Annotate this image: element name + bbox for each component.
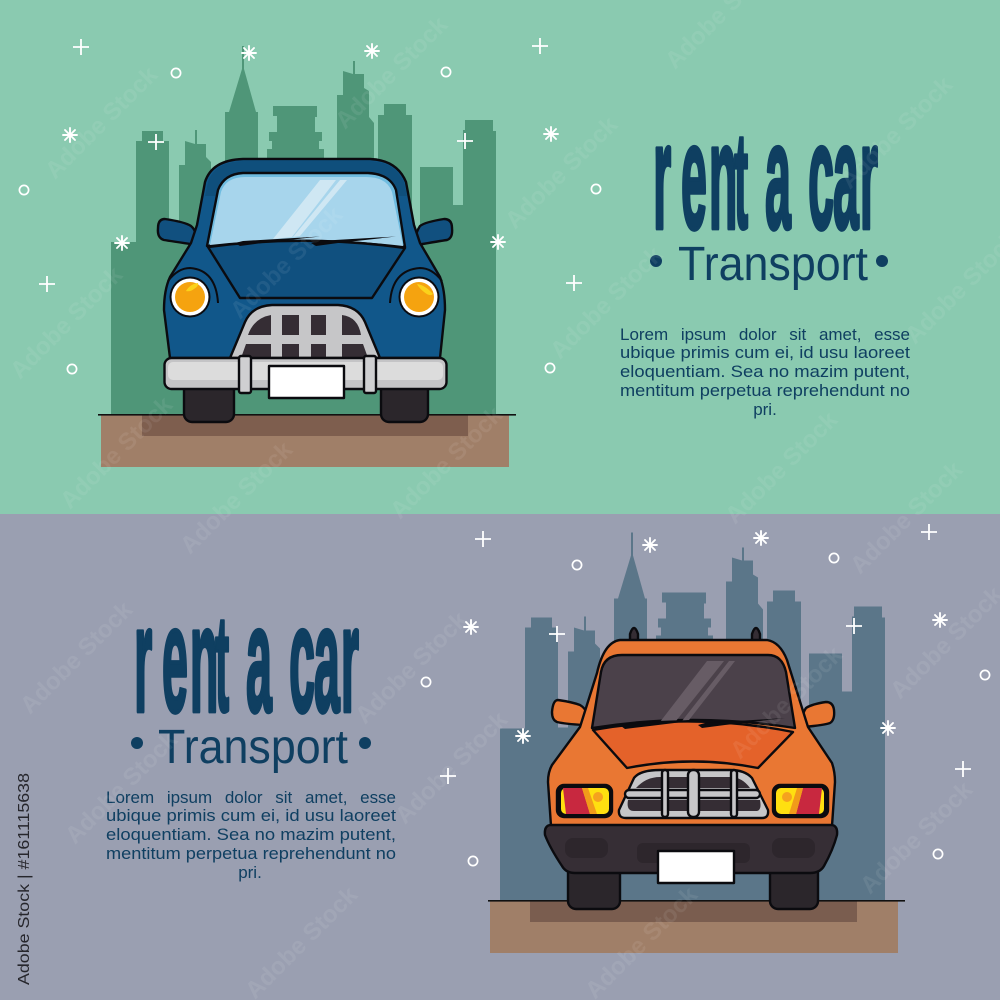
watermarks: Adobe Stock: Adobe Stock bbox=[225, 201, 348, 324]
road: bottom scene bbox=[488, 900, 905, 953]
subheading: Transport: Transport bbox=[158, 721, 348, 774]
body text: top: mentitum perpetua reprehendunt no bbox=[620, 381, 910, 400]
glare bbox=[273, 180, 347, 239]
watermarks: Adobe Stock: Adobe Stock bbox=[5, 261, 128, 384]
hood bbox=[208, 241, 405, 298]
body text: top: Lorem ipsum dolor sit amet, esse bbox=[620, 325, 910, 344]
hood bbox=[593, 721, 793, 768]
body text: top: eloquentiam. Sea no mazim putent, bbox=[620, 362, 910, 381]
left tail light bbox=[557, 785, 612, 817]
body bbox=[164, 159, 445, 358]
body text: bottom bbox=[106, 788, 396, 882]
watermarks: Adobe Stock: Adobe Stock bbox=[15, 596, 138, 719]
right headlight bbox=[398, 276, 440, 318]
watermarks: Adobe Stock: Adobe Stock bbox=[385, 401, 508, 524]
windshield bbox=[207, 173, 405, 247]
panel: grey bottom banner bbox=[0, 514, 1000, 1000]
sparkles: top scene bbox=[19, 38, 601, 374]
watermarks: Adobe Stock: Adobe Stock bbox=[175, 436, 298, 559]
watermarks: Adobe Stock: Adobe Stock bbox=[40, 61, 163, 184]
roof band bbox=[205, 161, 407, 196]
heading: rent a car: rent a car bbox=[653, 92, 878, 260]
watermarks: Adobe Stock: Adobe Stock bbox=[500, 111, 623, 234]
body text: bottom: mentitum perpetua reprehendunt no bbox=[106, 844, 396, 863]
mirrors bbox=[158, 219, 452, 245]
panel: green top banner bbox=[0, 0, 1000, 514]
watermarks: Adobe Stock: Adobe Stock bbox=[845, 456, 968, 579]
body bbox=[548, 640, 835, 826]
body text: bottom: Lorem ipsum dolor sit amet, esse bbox=[106, 788, 396, 807]
wipers bbox=[621, 718, 785, 729]
body text: bottom: eloquentiam. Sea no mazim putent, bbox=[106, 825, 396, 844]
watermarks: Adobe Stock: Adobe Stock bbox=[350, 606, 473, 729]
windshield bbox=[592, 655, 795, 728]
mirrors bbox=[552, 700, 834, 727]
body text: top: pri. bbox=[753, 400, 777, 419]
license plate bbox=[658, 851, 734, 883]
subheading: Transport: Transport bbox=[678, 238, 868, 291]
body text: top: ubique primis cum ei, id usu laoreet bbox=[620, 343, 910, 362]
bumper bbox=[164, 356, 446, 393]
watermarks: Adobe Stock: Adobe Stock bbox=[725, 641, 848, 764]
glare bbox=[660, 661, 735, 722]
watermarks: Adobe Stock: Adobe Stock bbox=[835, 71, 958, 194]
wheels bbox=[568, 865, 818, 909]
background: grey bbox=[0, 514, 1000, 1000]
sparkles: bottom scene bbox=[421, 524, 990, 866]
watermarks: Adobe Stock: Adobe Stock bbox=[60, 726, 183, 849]
car: orange front view bbox=[545, 628, 837, 909]
body text: top bbox=[620, 325, 910, 419]
road: top scene bbox=[98, 414, 516, 467]
background: green bbox=[0, 0, 1000, 514]
license plate bbox=[269, 366, 344, 398]
watermarks: Adobe Stock: Adobe Stock bbox=[855, 776, 978, 899]
watermarks: Adobe Stock: Adobe Stock bbox=[330, 11, 453, 134]
watermarks: Adobe Stock: Adobe Stock bbox=[720, 406, 843, 529]
watermarks: Adobe Stock: Adobe Stock bbox=[390, 706, 513, 829]
watermarks: Adobe Stock: Adobe Stock bbox=[55, 391, 178, 514]
body text: bottom: pri. bbox=[238, 863, 262, 882]
body text: bottom: ubique primis cum ei, id usu laoreet bbox=[106, 806, 396, 825]
heading: rent a car: rent a car bbox=[134, 575, 359, 743]
bumper bbox=[545, 825, 837, 873]
left headlight bbox=[170, 276, 210, 318]
car: blue front view bbox=[158, 159, 452, 422]
roof antennas bbox=[630, 628, 760, 641]
watermarks: Adobe Stock: Adobe Stock bbox=[545, 241, 668, 364]
grille bbox=[230, 305, 380, 358]
city skyline: slate bbox=[500, 532, 885, 902]
windshield glass bbox=[210, 177, 403, 246]
headlight arcs bbox=[168, 268, 442, 303]
wipers bbox=[235, 236, 396, 246]
grille bbox=[619, 770, 768, 818]
credit: vertical stock id: Adobe Stock | #161115638 bbox=[16, 773, 33, 985]
right tail light bbox=[773, 785, 828, 817]
wheels bbox=[184, 380, 428, 422]
city skyline: green bbox=[111, 46, 496, 415]
